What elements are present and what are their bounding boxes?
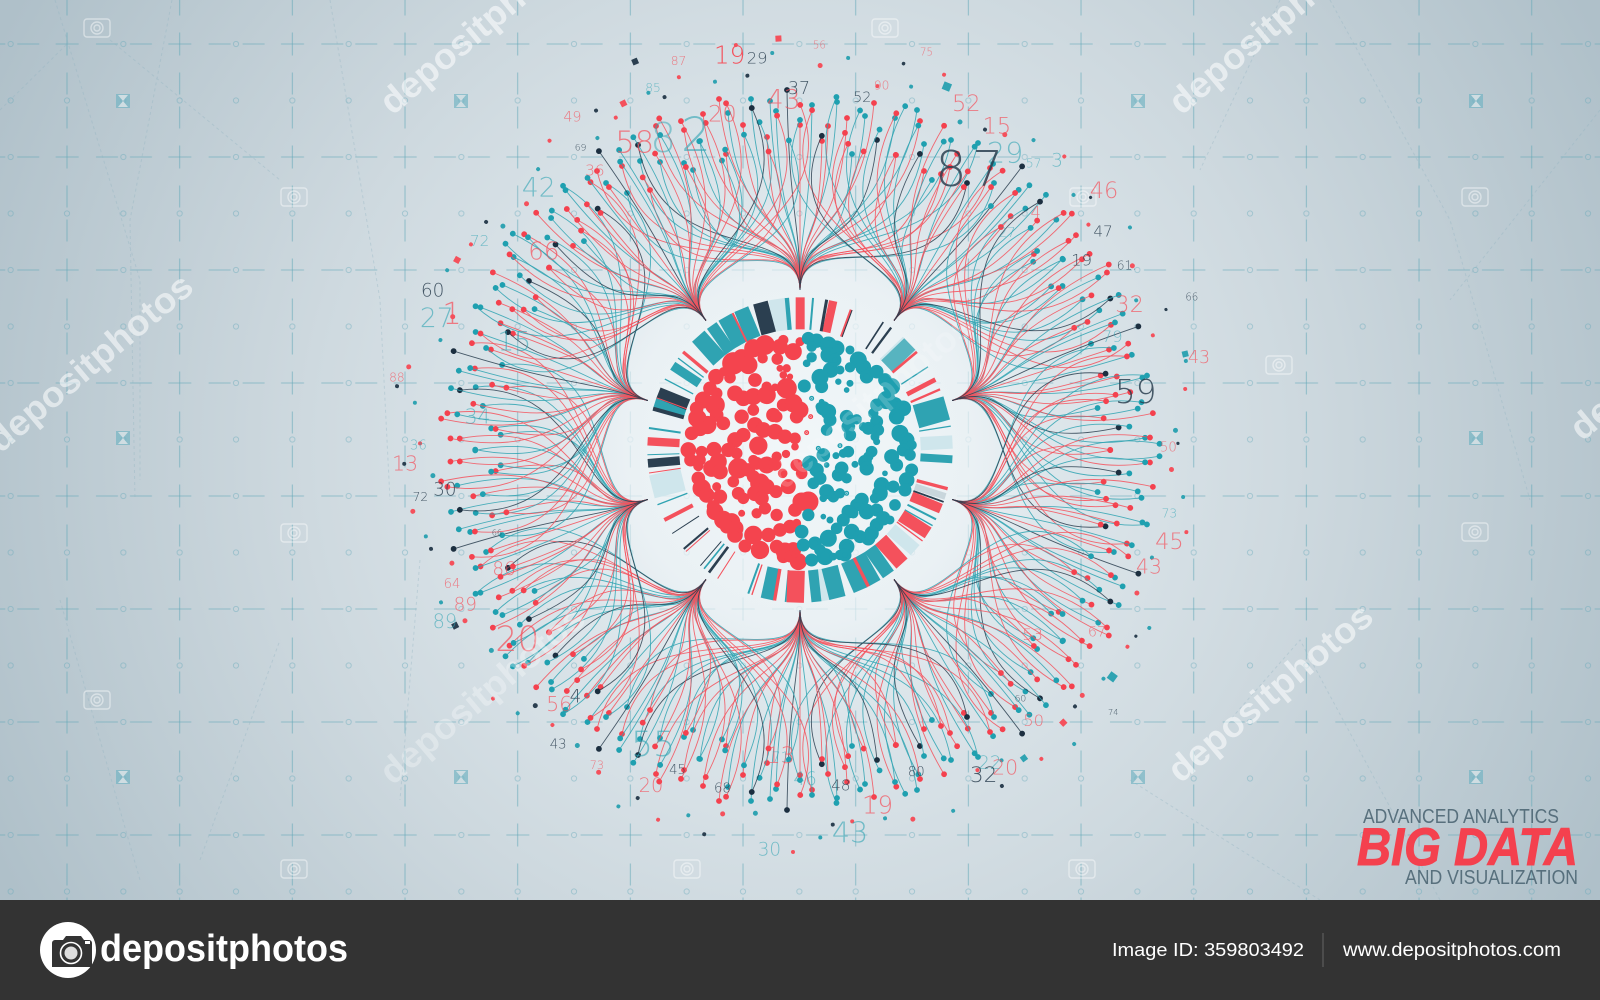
teal numbers: 79 bbox=[1102, 327, 1123, 346]
red numbers: 20 bbox=[992, 755, 1018, 779]
central bright disc bbox=[550, 200, 1050, 700]
teal numbers: 71 bbox=[772, 750, 790, 766]
watermark text bbox=[0, 0, 1600, 792]
teal numbers: 3 bbox=[1051, 151, 1063, 172]
teal numbers: 55 bbox=[631, 725, 675, 765]
red numbers: 86 bbox=[492, 559, 516, 580]
red numbers: 90 bbox=[874, 79, 889, 93]
red numbers: 46 bbox=[1090, 178, 1118, 204]
teal numbers: 43 bbox=[832, 816, 868, 850]
subtitle: advanced analytics: ADVANCED ANALYTICS bbox=[1363, 806, 1559, 828]
small hourglass markers bbox=[116, 94, 1483, 784]
teal hemisphere bbox=[797, 334, 916, 565]
dark numbers: 48 bbox=[831, 777, 851, 795]
dark numbers: 47 bbox=[1093, 223, 1113, 241]
watermark camera icons bbox=[84, 19, 1488, 878]
dark numbers: 59 bbox=[1115, 373, 1156, 411]
red numbers: 89 bbox=[454, 595, 477, 616]
dark numbers: 68 bbox=[714, 781, 731, 796]
dark numbers: 37 bbox=[788, 79, 810, 99]
dark numbers: 74 bbox=[1108, 707, 1118, 717]
dark numbers bbox=[413, 49, 1198, 796]
website url: www.depositphotos.com bbox=[1342, 940, 1561, 961]
red numbers: 43 bbox=[1136, 554, 1162, 578]
red numbers: 87 bbox=[671, 54, 686, 68]
teal numbers: 27 bbox=[999, 226, 1016, 241]
image id: Image ID: 359803492 bbox=[1112, 939, 1304, 960]
red hemisphere bbox=[682, 337, 817, 568]
dark numbers: 52 bbox=[853, 90, 871, 106]
dark numbers: 29 bbox=[747, 49, 768, 68]
dark numbers: 66 bbox=[492, 528, 502, 538]
dark numbers: 7 bbox=[972, 141, 1003, 198]
red numbers: 56 bbox=[813, 40, 826, 51]
teal numbers: 34 bbox=[465, 404, 491, 428]
title block: big data bbox=[1357, 806, 1578, 889]
red numbers: 13 bbox=[766, 743, 795, 769]
teal numbers: 2 bbox=[681, 108, 711, 163]
red numbers: 20 bbox=[708, 101, 737, 127]
dark numbers: 4 bbox=[570, 686, 581, 707]
red numbers: 36 bbox=[585, 161, 605, 179]
red numbers: 43 bbox=[767, 84, 801, 115]
outer scattered data points bbox=[395, 35, 1189, 854]
main heading: BIG DATA bbox=[1357, 818, 1578, 877]
red numbers: 45 bbox=[1155, 529, 1184, 555]
teal numbers: 73 bbox=[1162, 506, 1177, 520]
teal numbers: 42 bbox=[522, 172, 556, 203]
dark numbers: 32 bbox=[970, 763, 997, 788]
radial network diagram bbox=[395, 35, 1202, 861]
dark numbers: 72 bbox=[413, 490, 428, 504]
red numbers: 58 bbox=[615, 125, 654, 160]
teal numbers: 36 bbox=[410, 438, 427, 453]
dark numbers: 19 bbox=[1071, 251, 1092, 270]
watermark text: depositphotos bbox=[763, 304, 981, 496]
dark numbers: 80 bbox=[908, 765, 925, 780]
dark numbers: 45 bbox=[669, 763, 686, 778]
teal numbers: 89 bbox=[433, 610, 457, 633]
red numbers: 67 bbox=[1088, 625, 1106, 641]
red numbers: 73 bbox=[590, 759, 604, 772]
red numbers: 50 bbox=[1023, 711, 1044, 730]
watermark text: depositphotos bbox=[1159, 595, 1381, 790]
red numbers: 64 bbox=[444, 577, 460, 592]
red numbers: 15 bbox=[983, 114, 1011, 140]
red numbers: 66 bbox=[528, 237, 559, 266]
dark numbers: 8 bbox=[935, 141, 967, 198]
floating number labels bbox=[389, 40, 1210, 860]
red numbers: 50 bbox=[1160, 440, 1177, 455]
red numbers: 32 bbox=[1115, 292, 1144, 318]
teal numbers: 72 bbox=[470, 232, 489, 250]
dark numbers: 30 bbox=[433, 479, 457, 500]
red numbers: 75 bbox=[920, 48, 933, 59]
teal numbers: 46 bbox=[793, 769, 817, 790]
red numbers: 1 bbox=[442, 297, 462, 332]
icon: camera logo bbox=[40, 922, 96, 978]
teal numbers: 27 bbox=[420, 303, 454, 334]
teal numbers: 29 bbox=[987, 136, 1023, 170]
dark numbers: 69 bbox=[575, 142, 587, 153]
segmented outer ring bbox=[647, 297, 953, 603]
red numbers: 43 bbox=[1188, 348, 1210, 368]
red numbers: 56 bbox=[546, 692, 572, 716]
footer bar bbox=[0, 900, 1600, 1000]
teal numbers: 30 bbox=[758, 839, 781, 860]
teal numbers: 8 bbox=[650, 114, 676, 162]
teal numbers bbox=[410, 81, 1177, 860]
red numbers: 20 bbox=[639, 774, 663, 797]
red numbers: 88 bbox=[389, 371, 405, 385]
dark numbers: 66 bbox=[1185, 292, 1198, 303]
red numbers: 4 bbox=[1031, 203, 1041, 222]
red numbers: 53 bbox=[1022, 625, 1043, 644]
watermark text: depositphotos bbox=[371, 597, 593, 792]
teal numbers: 85 bbox=[645, 81, 661, 95]
red numbers: 19 bbox=[862, 791, 893, 820]
fan curves and end nodes bbox=[395, 39, 1202, 861]
teal numbers: 15 bbox=[497, 326, 531, 357]
teal numbers: 22 bbox=[978, 753, 1001, 774]
dark numbers: 60 bbox=[421, 280, 444, 301]
red numbers bbox=[389, 40, 1210, 820]
logo wordmark: depositphotos bbox=[100, 928, 348, 970]
teal numbers: 57 bbox=[1026, 156, 1041, 170]
dark numbers: 43 bbox=[550, 737, 567, 752]
dark numbers: 61. bbox=[1117, 258, 1136, 272]
dark numbers: 60 bbox=[1015, 693, 1026, 704]
red numbers: 49 bbox=[563, 109, 582, 125]
red numbers: 19 bbox=[714, 41, 745, 70]
red numbers: 13 bbox=[392, 451, 418, 475]
central bubble cluster bbox=[682, 334, 916, 568]
red numbers: 20 bbox=[495, 620, 539, 660]
subtitle: and visualization: AND VISUALIZATION bbox=[1405, 867, 1578, 889]
red numbers: 52 bbox=[952, 91, 981, 117]
